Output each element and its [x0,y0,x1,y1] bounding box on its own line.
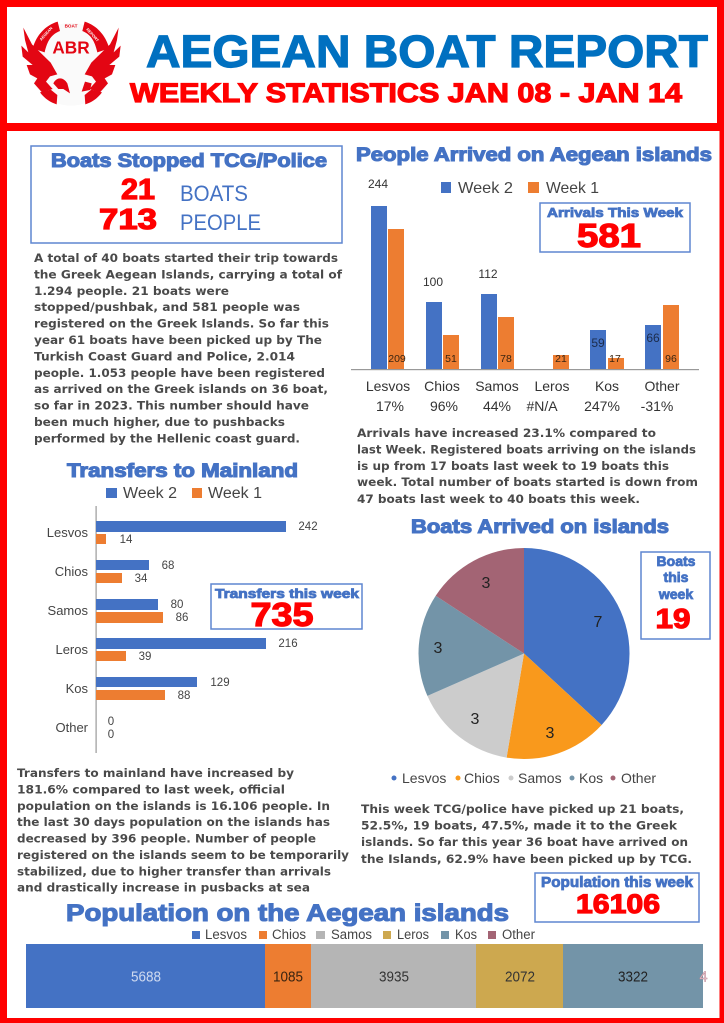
bar chart: transfers: 39 [139,651,151,663]
bar chart: arrivals: Chios [424,378,460,394]
callout: transfers this week [211,584,362,633]
stat: 21 boats [121,174,248,206]
callout: transfers this week: 735 [250,596,314,633]
icon: ABR eagle logo: ABR [52,38,90,58]
pie legend [392,770,656,786]
bar chart: arrivals: 21 [555,353,567,365]
pie chart: 7 [594,614,603,631]
bar chart: arrivals: 66 [646,331,660,345]
bar chart: arrivals: 112 [478,267,498,281]
legend: Kos [455,927,477,942]
text block: trip summary: Turkish Coast Guard and Police, 2.014 [34,349,295,363]
pie legend: Other [621,770,656,786]
text block: arrivals commentary: last Week. Registered boats arriving on the islands [357,442,696,456]
text block: transfers commentary: stabilized, due to higher transfer than arrivals [17,864,331,878]
text block: boats commentary: the Islands, 62.9% have been picked up by TCG. [361,852,692,866]
bar chart: transfers: 129 [210,677,230,689]
callout: boats this week: Boats [657,553,696,569]
bar chart: arrivals: 51 [445,353,457,365]
panel: boats arrived on islands [392,517,710,786]
text block: arrivals commentary [357,426,698,506]
callout: population this week [535,873,699,922]
pie chart [419,548,630,759]
bar chart: transfers: Chios [55,564,88,579]
title: AEGEAN BOAT REPORT [146,26,708,77]
bar chart: arrivals: Lesvos [366,378,410,394]
subtitle: WEEKLY STATISTICS JAN 08 - JAN 14 [130,78,682,108]
stat: 713 people [99,204,261,236]
bar chart: arrivals: Leros [534,378,570,394]
stacked bar chart: population: 4 [699,970,708,986]
legend: Week 1 [208,485,262,502]
text block: boats commentary: This week TCG/police have picked up 21 boats, [361,802,684,816]
text block: trip summary: A total of 40 boats started their trip towards [34,251,338,265]
callout: transfers this week: Transfers this week [215,586,360,601]
text block: boats commentary [361,802,692,866]
bar chart: arrivals: #N/A [526,398,558,414]
bar chart: arrivals: 96 [665,353,677,365]
icon: ABR eagle logo: BOAT [65,24,78,29]
legend: Other [502,927,535,942]
legend: Week 1 [546,180,599,197]
callout: population this week: 16106 [576,889,660,919]
legend: Leros [397,927,429,942]
text block: arrivals commentary: 47 boats last week to 40 boats this week. [357,492,640,506]
bar chart: arrivals: 78 [500,353,512,365]
bar chart: arrivals: 244 [368,177,388,191]
stat: 713 people: PEOPLE [180,210,261,235]
legend: Week 2 [458,180,513,197]
callout: arrivals this week [540,203,690,254]
pie legend: Lesvos [402,770,446,786]
pie legend: Chios [464,770,500,786]
pie legend: Kos [579,770,603,786]
heading: Boats Stopped TCG/Police [51,151,327,172]
legend: Week 2 [123,485,177,502]
legend: Samos [331,927,372,942]
bar chart: arrivals: 209 [388,353,406,365]
stacked bar chart: population: 3935 [379,970,409,986]
bar chart: transfers: 34 [135,573,148,585]
text block: transfers commentary: Transfers to mainland have increased by [17,766,295,780]
bar chart: transfers: 88 [178,690,190,702]
text block: trip summary: the Greek Aegean Islands, carrying a total of [34,267,343,281]
stacked bar chart: population [26,944,708,1008]
bar chart: transfers: 80 [171,599,183,611]
legend [192,927,535,942]
text block: transfers commentary: registered on the islands seem to be temporarily [17,848,350,862]
bar chart: arrivals [351,177,699,414]
callout: boats this week: 19 [656,603,690,634]
text block: trip summary [34,251,343,445]
callout: population this week: Population this week [541,875,694,891]
bar chart: transfers: Lesvos [47,525,88,540]
text block: trip summary: year 61 boats have been picked up by The [34,333,322,347]
callout: boats this week: this [664,569,689,585]
text block: boats commentary: islands. So far this year 36 boat have arrived on [361,835,688,849]
bar chart: arrivals: Samos [475,378,519,394]
stacked bar chart: population: 3322 [618,970,648,986]
bar chart: transfers: 242 [298,521,318,533]
heading: People Arrived on Aegean islands [356,145,712,166]
bar chart: transfers: Other [55,720,89,735]
text block: transfers commentary: 181.6% compared to last week, official [17,782,285,796]
heading: Transfers to Mainland [67,461,298,482]
panel: population on the Aegean islands [26,873,708,1008]
callout: boats this week: week [658,586,693,602]
bar chart: transfers: 14 [120,534,133,546]
text block: boats commentary: 52.5%, 19 boats, 47.5%, made it to the Greek [361,818,677,832]
text block: transfers commentary: population on the islands is 16.106 people. In [17,799,330,813]
text block: trip summary: registered on the Greek Islands. So far this [34,317,329,331]
text block: transfers commentary: and drastically increase in pusbacks at sea [17,881,310,895]
header [21,22,708,108]
legend: Lesvos [205,927,247,942]
bar chart: transfers: 0 [108,716,114,728]
panel: people arrived [351,145,712,414]
text block: trip summary: people. 1.053 people have been registered [34,366,325,380]
legend [106,485,262,502]
bar chart: transfers [47,506,318,753]
bar chart: arrivals: 44% [483,398,511,414]
stacked bar chart: population: 2072 [505,970,535,986]
pie chart: 3 [482,575,491,592]
legend: Chios [272,927,306,942]
bar chart: arrivals: 100 [423,275,443,289]
text block: trip summary: so far in 2023. This number should have [34,399,309,413]
heading: Boats Arrived on islands [411,517,669,538]
stacked bar chart: population: 5688 [131,970,161,986]
text block: trip summary: 1.294 people. 21 boats were [34,284,229,298]
callout: boats this week [641,552,710,639]
icon: ABR eagle logo [21,22,121,106]
bar chart: transfers: Leros [55,642,88,657]
pie legend: Samos [518,770,562,786]
stacked bar chart: population: 1085 [273,970,303,986]
bar chart: arrivals: 96% [430,398,458,414]
icon: ABR eagle logo: AEGEAN [38,26,54,42]
bar chart: arrivals: 59 [591,336,605,350]
text block: transfers commentary: decreased by 396 people. Number of people [17,832,316,846]
stat: 21 boats: BOATS [180,181,248,206]
bar chart: transfers: Samos [48,603,88,618]
bar chart: transfers: 0 [108,729,114,741]
legend [441,180,599,197]
bar chart: arrivals: 17% [376,398,404,414]
stat: 713 people: 713 [99,204,157,236]
pie chart: 3 [434,640,443,657]
text block: trip summary: stopped/pushbak, and 581 people was [34,300,300,314]
panel: transfers to mainland [47,461,362,753]
pie chart: 3 [471,711,480,728]
bar chart: arrivals: 247% [584,398,620,414]
callout: arrivals this week: 581 [577,217,641,254]
bar chart: transfers: 68 [162,560,174,572]
heading: Population on the Aegean islands [66,900,509,927]
text block: transfers commentary: the last 30 days population on the islands has [17,815,330,829]
text block: transfers commentary [17,766,350,895]
bar chart: transfers: 86 [176,612,188,624]
text block: trip summary: performed by the Hellenic coast guard. [34,431,300,445]
icon: ABR eagle logo: REPORT [85,27,100,43]
text block: trip summary: been much higher, due to pushbacks [34,415,285,429]
bar chart: arrivals: 17 [609,353,621,365]
text block: arrivals commentary: week. Total number of boats started is down from [357,475,698,489]
text block: arrivals commentary: Arrivals have increased 23.1% compared to [357,426,656,440]
bar chart: transfers: 216 [278,638,298,650]
bar chart: transfers: Kos [66,681,88,696]
bar chart: arrivals: Kos [595,378,619,394]
text block: arrivals commentary: is up from 17 boats last week to 19 boats this [357,459,669,473]
panel: boats stopped TCG/Police [31,146,342,243]
text block: trip summary: as arrived on the Greek islands on 36 boat, [34,382,328,396]
pie chart: 3 [546,725,555,742]
bar chart: arrivals: Other [644,378,680,394]
callout: arrivals this week: Arrivals This Week [547,205,684,220]
bar chart: arrivals: -31% [641,398,673,414]
stat: 21 boats: 21 [121,174,155,206]
